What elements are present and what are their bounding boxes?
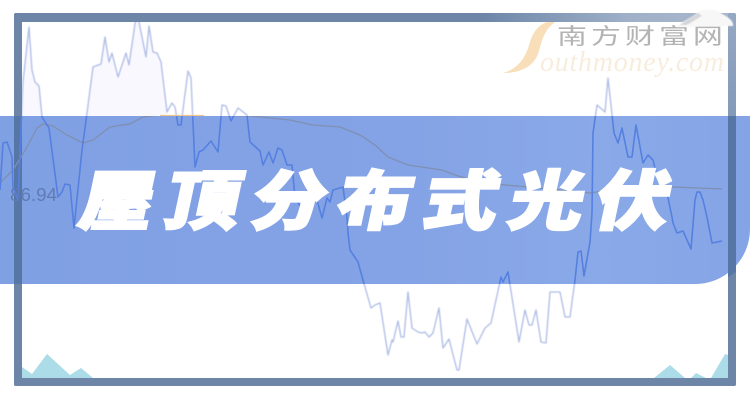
logo swoosh <box>503 19 560 73</box>
price line <box>0 116 722 284</box>
line chart area fill <box>23 17 168 116</box>
cloud at top-right corner <box>676 10 733 27</box>
logo chinese name: 南方财富网 <box>557 18 727 51</box>
mountains bottom-right <box>654 354 728 378</box>
title band <box>0 116 750 284</box>
orange moving-average segment above band <box>160 114 204 116</box>
moving average line <box>0 115 722 193</box>
title: 屋顶分布式光伏 <box>73 166 690 238</box>
logo latin name: outhmoney.com <box>540 47 724 78</box>
logo: southmoney <box>503 18 727 78</box>
frame seen through band <box>14 116 736 284</box>
line chart inside band <box>0 116 722 284</box>
axis value label: 86.94 <box>10 185 57 205</box>
mountains bottom-left <box>22 354 93 378</box>
